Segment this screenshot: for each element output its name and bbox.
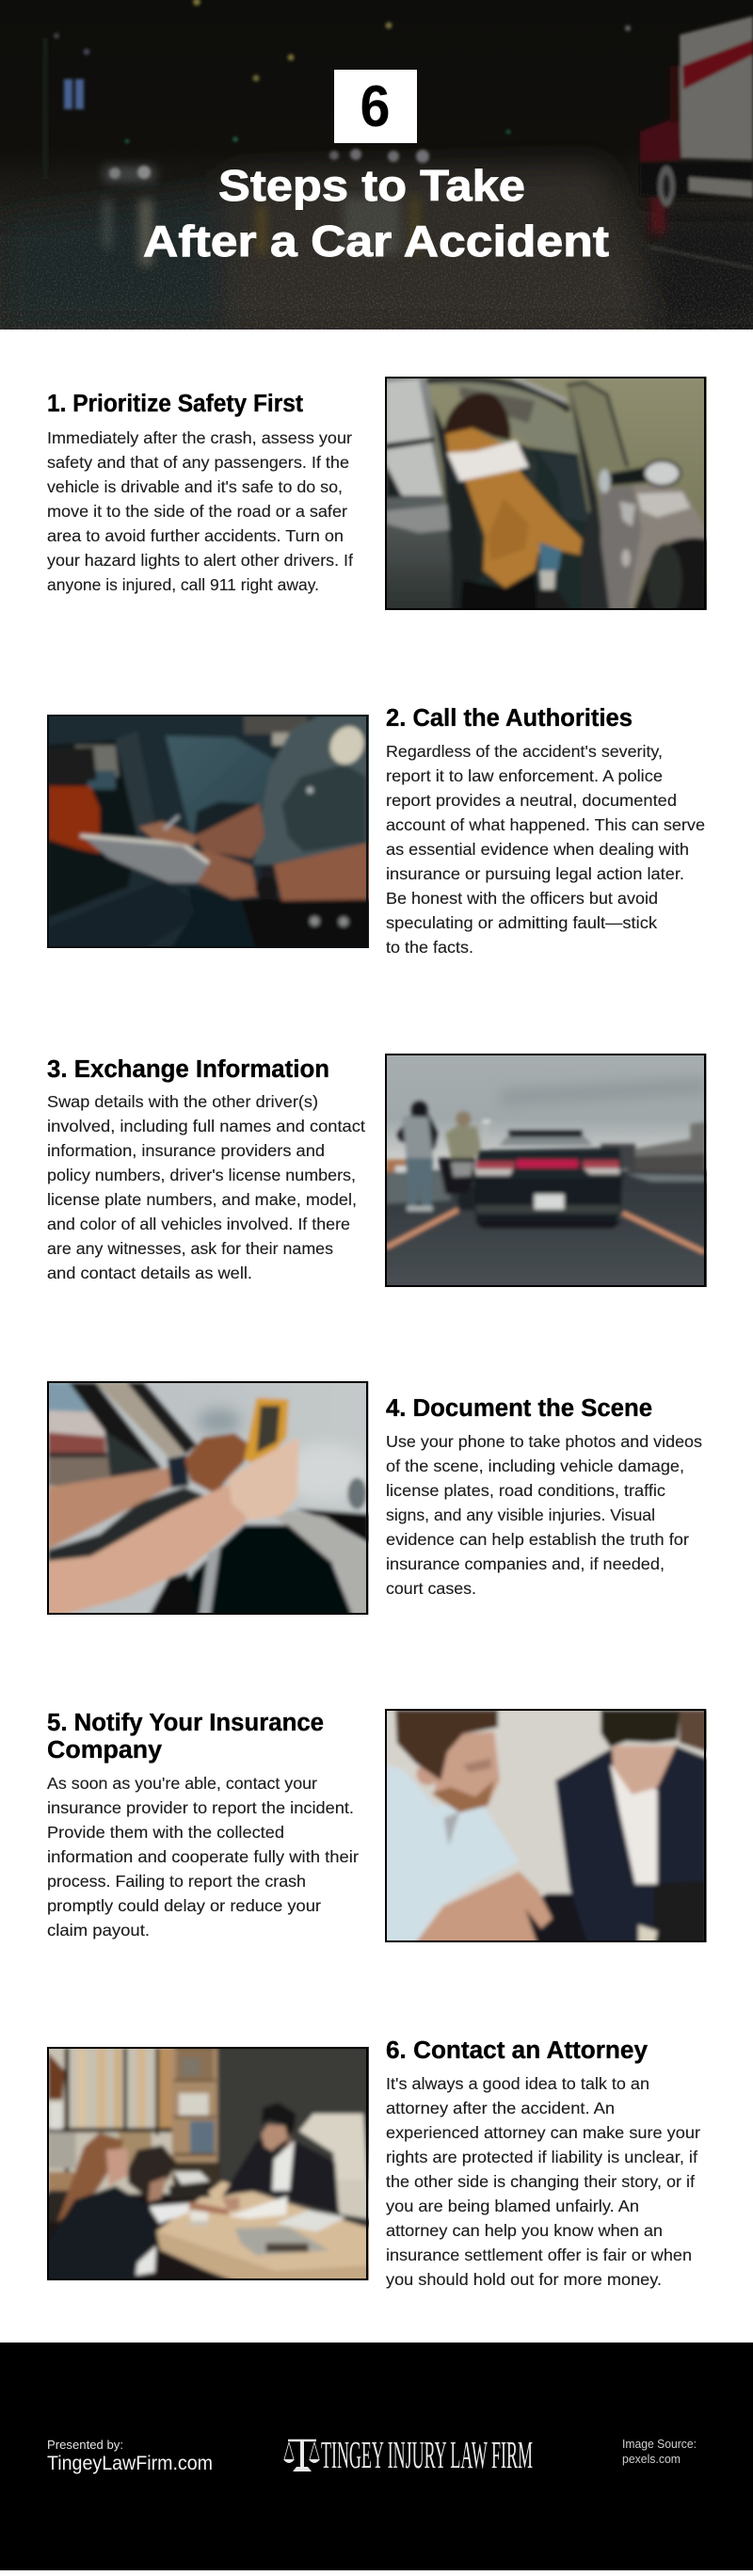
text: step 4: Use your phone to take photos and videos [386,1432,702,1451]
heading: step 6: 6. Contact an Attorney [386,2037,649,2064]
text: step 5 [47,1774,359,1940]
panel: step 4 [43,1377,702,1619]
text: step 4: insurance companies and, if needed, [386,1554,665,1573]
text: step 1: your hazard lights to alert other drivers. If [47,551,353,570]
text: step 3: involved, including full names and contact [47,1117,365,1135]
photo frame [386,1710,705,1941]
text: step 1: move it to the side of the road or a safer [47,502,347,521]
title: Steps to Take [218,161,525,210]
text: step 3 [47,1092,365,1282]
text: step 5: insurance provider to report the incident. [47,1798,354,1817]
panel: step 1 [47,373,711,616]
number badge: 6 [360,74,390,139]
icon: scales of justice [283,2440,320,2471]
text: step 6: rights are protected if liability is unclear, if [386,2148,697,2166]
text: step 4: license plates, road conditions, traffic [386,1481,665,1500]
text: step 1: area to avoid further accidents. Turn on [47,526,344,545]
text: step 3: Swap details with the other driver(s) [47,1092,318,1111]
photo: clients meeting an attorney at a desk [43,2043,373,2285]
text: step 4: evidence can help establish the truth for [386,1530,689,1549]
panel: step 3 [47,1050,711,1292]
title: After a Car Accident [143,217,609,266]
panel: step 2 [43,705,705,957]
text: step 2: Regardless of the accident's severity, [386,742,663,761]
text: step 2: account of what happened. This can serve [386,815,705,834]
text: step 3: policy numbers, driver's license numbers, [47,1166,356,1184]
footer: image source: Image Source: [622,2437,697,2451]
title [143,161,609,266]
text: step 1: safety and that of any passengers. If the [47,453,349,472]
text: step 3: information, insurance providers and [47,1141,325,1160]
text: step 4: of the scene, including vehicle damage, [386,1457,684,1475]
header banner [0,0,753,334]
text: step 6: attorney after the accident. An [386,2099,615,2117]
text: step 6: It's always a good idea to talk to an [386,2074,649,2093]
text: step 2: insurance or pursuing legal action later. [386,864,684,883]
heading: step 5: 5. Notify Your Insurance [47,1710,324,1736]
number badge [334,70,417,143]
text: step 2: speculating or admitting fault—stick [386,913,657,932]
text: step 6: you are being blamed unfairly. An [386,2197,639,2215]
photo frame [386,1055,705,1286]
text: step 2: report it to law enforcement. A police [386,766,663,785]
text: step 1: Immediately after the crash, assess your [47,428,352,447]
text: step 6: the other side is changing their story, or if [386,2172,695,2191]
footer: image source [622,2437,697,2466]
text: step 2: to the facts. [386,938,473,957]
text: step 5: process. Failing to report the crash [47,1872,306,1891]
footer [0,2343,753,2570]
photo frame [48,2048,367,2279]
photo: hands photographing with a phone from the driver's seat [43,1377,373,1619]
text: step 5: As soon as you're able, contact your [47,1774,317,1793]
footer: image source: pexels.com [622,2452,681,2466]
text: step 5: claim payout. [47,1921,150,1940]
heading: step 3: 3. Exchange Information [47,1056,329,1083]
photo frame [48,1382,367,1614]
footer: presented by [47,2438,213,2474]
text: step 6: attorney can help you know when an [386,2221,663,2240]
heading: step 1: 1. Prioritize Safety First [47,391,303,417]
text: step 4: signs, and any visible injuries. Visual [386,1505,655,1524]
text: step 2: as essential evidence when dealing with [386,840,689,859]
text: step 2: report provides a neutral, documented [386,791,677,810]
heading: step 5 [47,1710,324,1763]
heading: step 2: 2. Call the Authorities [386,705,633,732]
photo frame [386,378,705,609]
text: step 3: and contact details as well. [47,1264,252,1282]
text: step 3: license plate numbers, and make, model, [47,1190,357,1209]
text: step 6: experienced attorney can make sure your [386,2123,700,2142]
text: step 1 [47,428,353,594]
text: step 6: you should hold out for more money. [386,2270,662,2289]
photo frame [48,716,367,947]
heading: step 5: Company [47,1737,163,1763]
photo: officer writing a report [43,711,373,953]
text: step 5: information and cooperate fully with their [47,1847,359,1866]
text: step 3: are any witnesses, ask for their names [47,1239,333,1258]
photo: woman getting out of damaged car [381,373,711,616]
heading: step 4: 4. Document the Scene [386,1395,652,1422]
text: step 6 [386,2074,700,2289]
footer: presented by: TingeyLawFirm.com [47,2453,213,2474]
text: step 5: promptly could delay or reduce your [47,1896,321,1915]
panel: step 6 [43,2037,700,2289]
photo: man and woman reviewing documents [381,1705,711,1947]
photo: drivers beside a black car in a parking lot [381,1050,711,1292]
text: step 1: anyone is injured, call 911 right away. [47,575,319,594]
text: step 2: Be honest with the officers but avoid [386,889,658,908]
footer: presented by: Presented by: [47,2438,123,2452]
text: step 1: vehicle is drivable and it's safe to do so, [47,477,343,496]
text: step 2 [386,742,705,957]
text: step 3: and color of all vehicles involved. If there [47,1215,350,1233]
header photo: rainy night road with truck [0,0,753,334]
text: step 4: court cases. [386,1579,476,1598]
text: step 4 [386,1432,702,1598]
text: step 6: insurance settlement offer is fair or when [386,2246,692,2264]
panel: step 5 [47,1705,711,1947]
text: step 5: Provide them with the collected [47,1823,284,1842]
